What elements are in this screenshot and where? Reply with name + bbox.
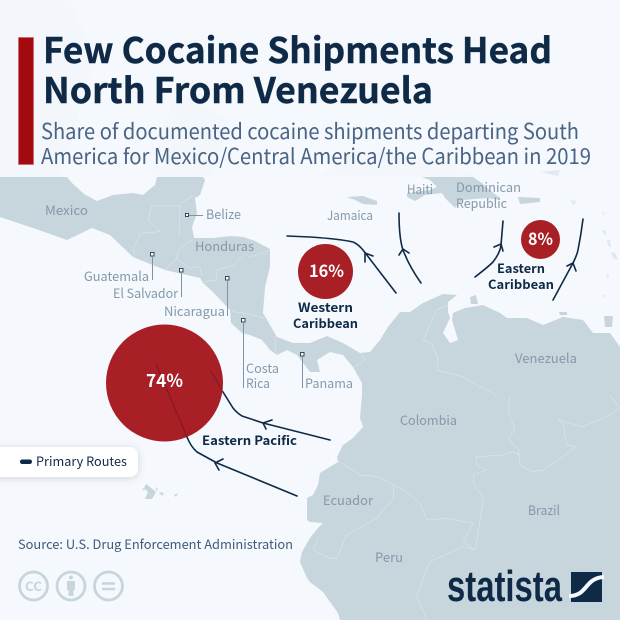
source: Source: U.S. Drug Enforcement Administration xyxy=(18,534,293,553)
map: Central and South America xyxy=(0,170,620,620)
country labels: Panama xyxy=(305,373,353,392)
bubble: Eastern Pacific xyxy=(106,324,223,442)
label: Eastern Caribbean: Caribbean xyxy=(488,274,554,293)
value: 74%: 74% xyxy=(146,367,183,393)
subtitle: America for Mexico/Central America/the Caribbean in 2019 xyxy=(41,140,591,171)
country labels: Ecuador xyxy=(323,490,374,509)
logo: statista: statista xyxy=(447,562,562,611)
label: Eastern Pacific: Eastern Pacific xyxy=(202,430,297,449)
country labels: Mexico xyxy=(45,200,88,219)
icons: creative commons licence: CC xyxy=(25,576,42,595)
title: North From Venezuela xyxy=(43,63,433,114)
label: Eastern Caribbean: Eastern xyxy=(497,258,545,277)
label: Western Caribbean xyxy=(293,297,358,332)
country labels: Haiti xyxy=(407,179,433,198)
subtitle: Share of documented cocaine shipments departing South xyxy=(41,115,579,146)
icons: creative commons licence xyxy=(20,572,122,600)
label: Eastern Caribbean xyxy=(488,258,554,293)
title: Few Cocaine Shipments Head xyxy=(43,23,552,74)
bubble: Western Caribbean 16% xyxy=(298,244,353,299)
routes: Western Caribbean xyxy=(287,213,421,293)
subtitle xyxy=(41,115,591,171)
islands: Galapagos xyxy=(142,484,178,499)
label: Western Caribbean: Caribbean xyxy=(293,313,358,332)
legend: primary routes: Primary Routes xyxy=(36,451,127,470)
islands: Hispaniola, Jamaica, Puerto Rico and Antilles xyxy=(347,177,613,327)
country labels xyxy=(45,177,577,566)
country labels: Colombia xyxy=(400,410,457,429)
bubble: Eastern Caribbean 8%: 8% xyxy=(528,225,553,250)
country labels: El Salvador xyxy=(113,283,179,302)
country labels: Jamaica xyxy=(327,205,373,224)
land: Mexico, Central America and South America xyxy=(0,177,620,620)
routes: Eastern Pacific xyxy=(156,364,330,496)
country labels: Nicaragua xyxy=(164,301,225,320)
routes: Eastern Caribbean xyxy=(475,219,583,300)
country labels: Dominican xyxy=(456,177,521,196)
title xyxy=(43,23,552,114)
country labels: Costa xyxy=(246,358,279,377)
country labels: Honduras xyxy=(195,236,254,255)
country labels: Republic xyxy=(456,193,507,212)
country labels: Rica xyxy=(246,373,270,392)
country labels: Brazil xyxy=(528,500,560,519)
country labels: Venezuela xyxy=(515,348,577,367)
title accent bar xyxy=(18,38,34,164)
country labels: Peru xyxy=(375,547,403,566)
bubble: Eastern Caribbean 8% xyxy=(521,220,560,259)
country labels: Guatemala xyxy=(84,266,149,285)
legend: primary routes xyxy=(0,447,138,477)
label: Western Caribbean: Western xyxy=(298,297,353,316)
country labels: Belize xyxy=(206,204,241,223)
bubble: Western Caribbean 16%: 16% xyxy=(309,257,344,282)
country borders xyxy=(133,195,277,355)
leader lines and markers xyxy=(150,214,304,388)
